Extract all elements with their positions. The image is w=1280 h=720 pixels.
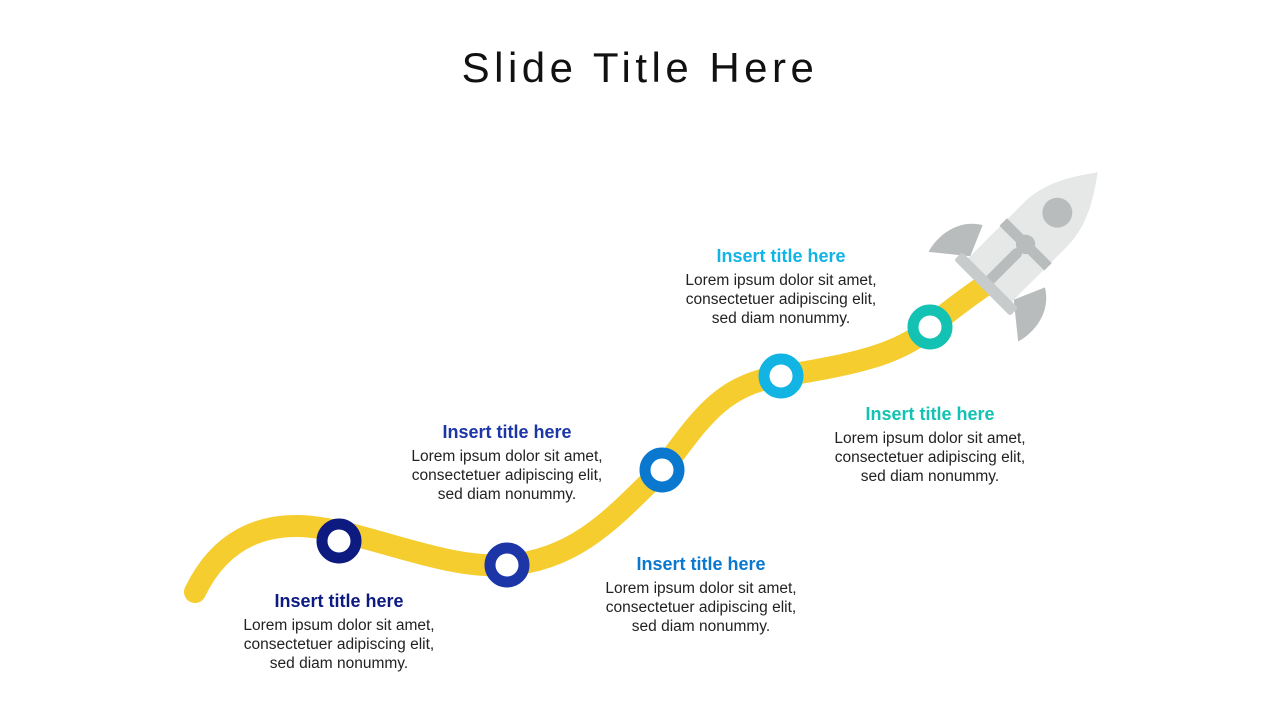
text block 4: Insert title here xyxy=(716,246,846,266)
text block 2: consectetuer adipiscing elit, xyxy=(412,467,602,484)
text block 1: Insert title here xyxy=(274,591,404,611)
text block 5: sed diam nonummy. xyxy=(861,468,999,485)
text block 3: consectetuer adipiscing elit, xyxy=(606,599,796,616)
text block 2: Insert title here xyxy=(442,422,572,442)
text block 2: Lorem ipsum dolor sit amet, xyxy=(411,448,603,465)
text block 1: sed diam nonummy. xyxy=(270,655,408,672)
title: Slide Title Here xyxy=(462,44,818,91)
text block 3: Insert title here xyxy=(636,554,766,574)
markers xyxy=(322,310,947,582)
text block 5: consectetuer adipiscing elit, xyxy=(835,449,1025,466)
text block 1: Lorem ipsum dolor sit amet, xyxy=(243,617,435,634)
road path xyxy=(195,275,1000,592)
text block 5: Insert title here xyxy=(865,404,995,424)
icon: rocket xyxy=(927,126,1144,343)
text block 1: consectetuer adipiscing elit, xyxy=(244,636,434,653)
text block 4: consectetuer adipiscing elit, xyxy=(686,291,876,308)
text block 2 xyxy=(411,422,603,503)
text block 4 xyxy=(685,246,877,327)
text block 1 xyxy=(243,591,435,672)
text block 5: Lorem ipsum dolor sit amet, xyxy=(834,430,1026,447)
text block 4: Lorem ipsum dolor sit amet, xyxy=(685,272,877,289)
text block 3: Lorem ipsum dolor sit amet, xyxy=(605,580,797,597)
text block 2: sed diam nonummy. xyxy=(438,486,576,503)
text block 4: sed diam nonummy. xyxy=(712,310,850,327)
text block 5 xyxy=(834,404,1026,485)
text block 3: sed diam nonummy. xyxy=(632,618,770,635)
text block 3 xyxy=(605,554,797,635)
